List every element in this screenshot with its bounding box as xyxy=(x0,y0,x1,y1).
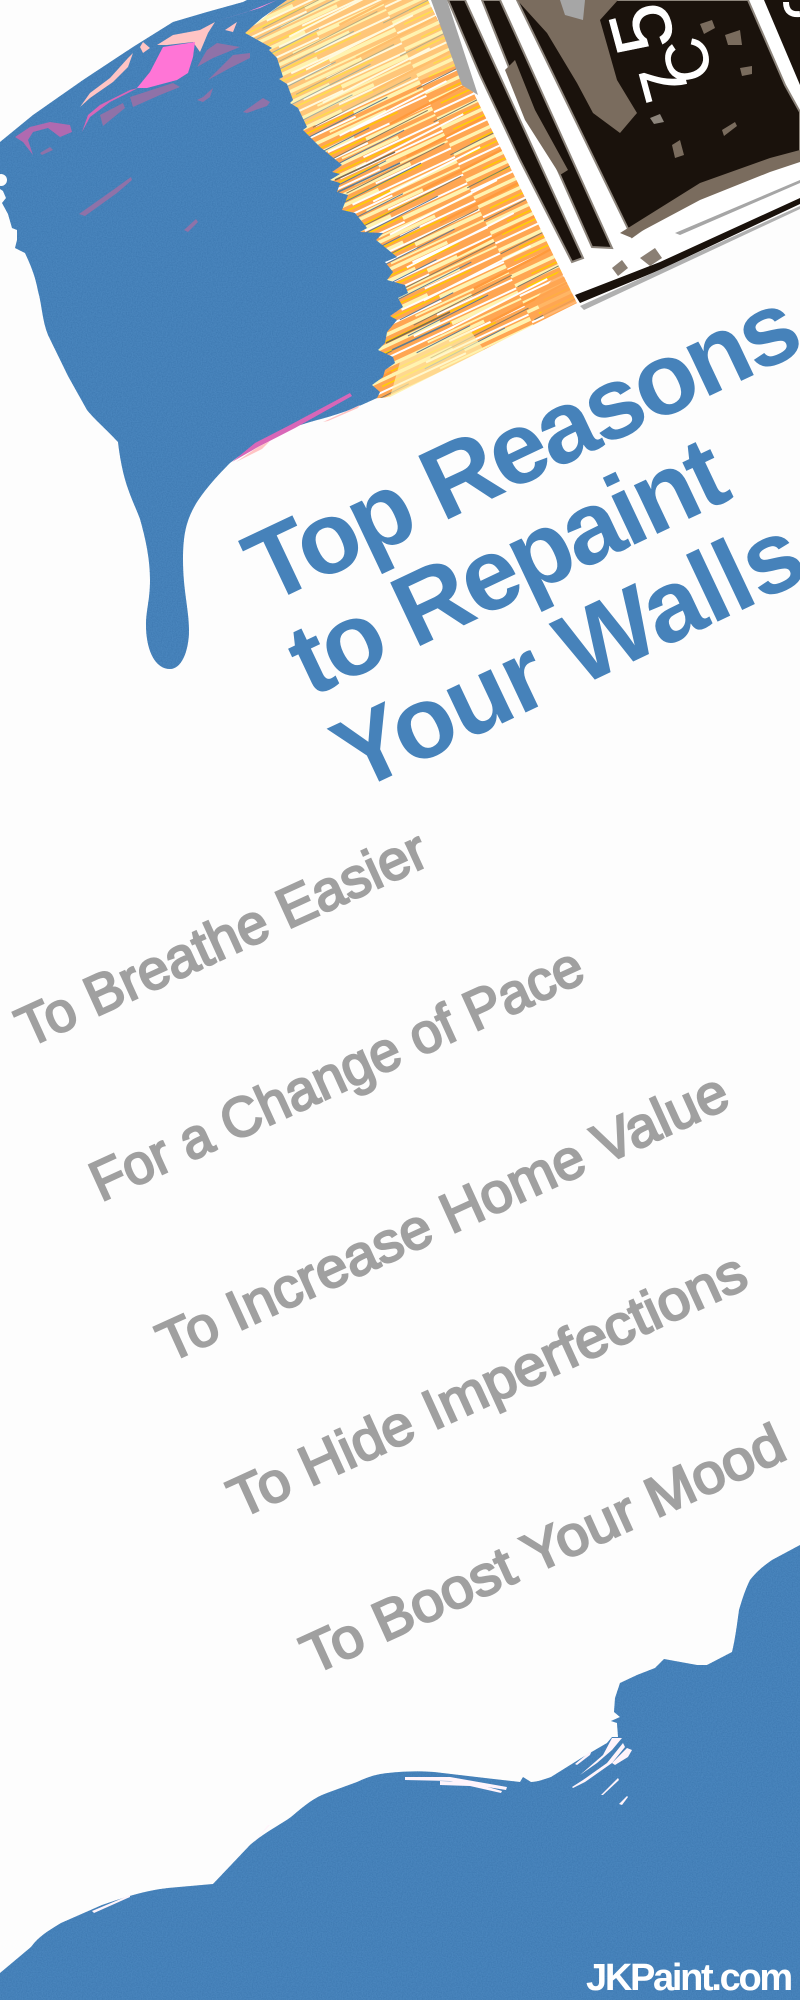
title line 2: to Repaint xyxy=(271,414,744,718)
white brush streaks xyxy=(92,1738,632,1913)
brush size numeral 7: 7 xyxy=(627,57,703,108)
reason 5: To Boost Your Mood xyxy=(291,1411,794,1686)
pink paint streaks xyxy=(15,0,360,462)
brush bristles xyxy=(240,0,577,400)
list of reasons xyxy=(6,817,794,1686)
white speck on paint edge xyxy=(0,174,7,186)
website address: JKPaint.com xyxy=(586,1957,791,1999)
stray bristle tips xyxy=(335,152,450,350)
reason 3: To Increase Home Value xyxy=(147,1059,738,1374)
small numeral fragment at corner xyxy=(786,2,800,14)
reason 2: For a Change of Pace xyxy=(80,934,593,1213)
brush ferrule xyxy=(428,0,800,310)
brush size letter C: C xyxy=(650,31,726,90)
reason 1: To Breathe Easier xyxy=(6,817,436,1059)
title: Top Reasons to Repaint Your Walls xyxy=(228,266,800,813)
title line 1: Top Reasons xyxy=(228,266,800,625)
illustration: paint brush and blue paint at top xyxy=(0,0,800,669)
blue paint stroke at bottom xyxy=(0,1545,800,2000)
reason 4: To Hide Imperfections xyxy=(218,1240,756,1530)
blue paint on brush with drip xyxy=(0,0,408,669)
